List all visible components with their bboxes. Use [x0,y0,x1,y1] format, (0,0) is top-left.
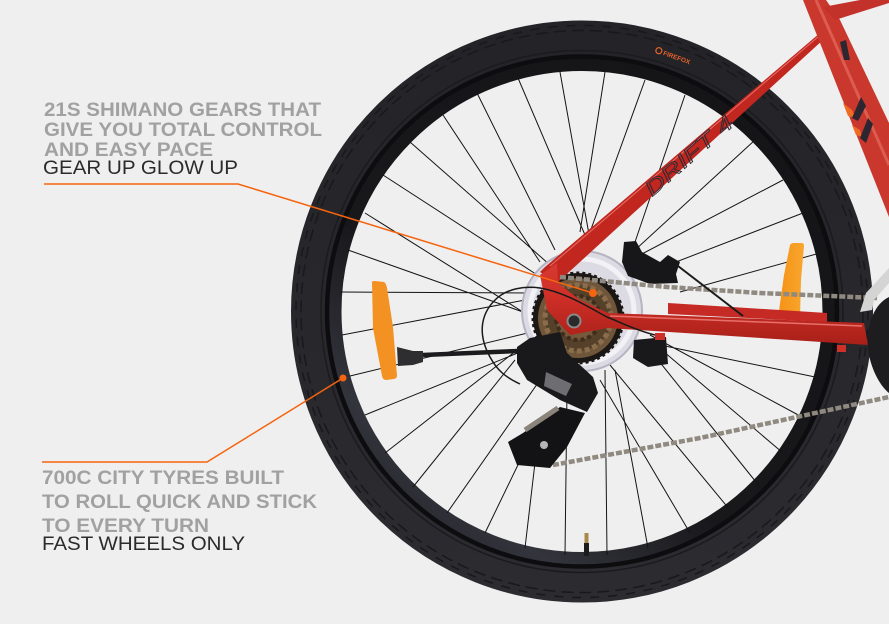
lower chain [553,397,889,465]
seat tube graphics [840,40,873,143]
tyres heading: FAST WHEELS ONLY [42,534,245,555]
gears heading: GEAR UP GLOW UP [43,158,238,179]
reflector mount rod [397,347,518,366]
seat stay tube [540,33,824,283]
frame lettering: DRIFT 4 [641,112,738,201]
tyres description: TO ROLL QUICK AND STICK [42,492,317,513]
seat tube [803,0,889,217]
tyres description: 700C CITY TYRES BUILT [42,468,284,489]
upper chain [560,277,877,298]
axle bolt [568,314,580,328]
gears description: GIVE YOU TOTAL CONTROL [44,120,322,141]
chainguard [860,268,889,312]
tyre [296,26,868,598]
rear dropout and chain stay [540,263,868,345]
valve [584,533,589,556]
reflector: right [778,243,804,320]
tyres leader line [42,374,346,462]
spokes [340,72,820,555]
brake bracket below stay [633,337,668,367]
brake disc [522,251,642,371]
chain stay tube far [668,303,827,322]
tyres description [42,468,317,537]
rear derailleur [508,332,598,468]
top tube [823,0,889,20]
tyres description: TO EVERY TURN [42,516,209,537]
callout: tyres [42,374,346,555]
reflector: left [372,281,397,380]
brake and shifter cables [482,287,655,384]
chainring [868,297,889,393]
gears description: 21S SHIMANO GEARS THAT [44,100,321,121]
rear cassette [533,273,623,363]
cable clips [655,333,846,352]
gears description: AND EASY PACE [44,140,213,161]
callout: gears [43,100,597,297]
brake caliper [622,241,680,284]
tyre brand label: FIREFOX [662,50,692,66]
gears description [44,100,322,161]
tyre brand label [655,47,692,66]
gears leader line [44,184,597,297]
